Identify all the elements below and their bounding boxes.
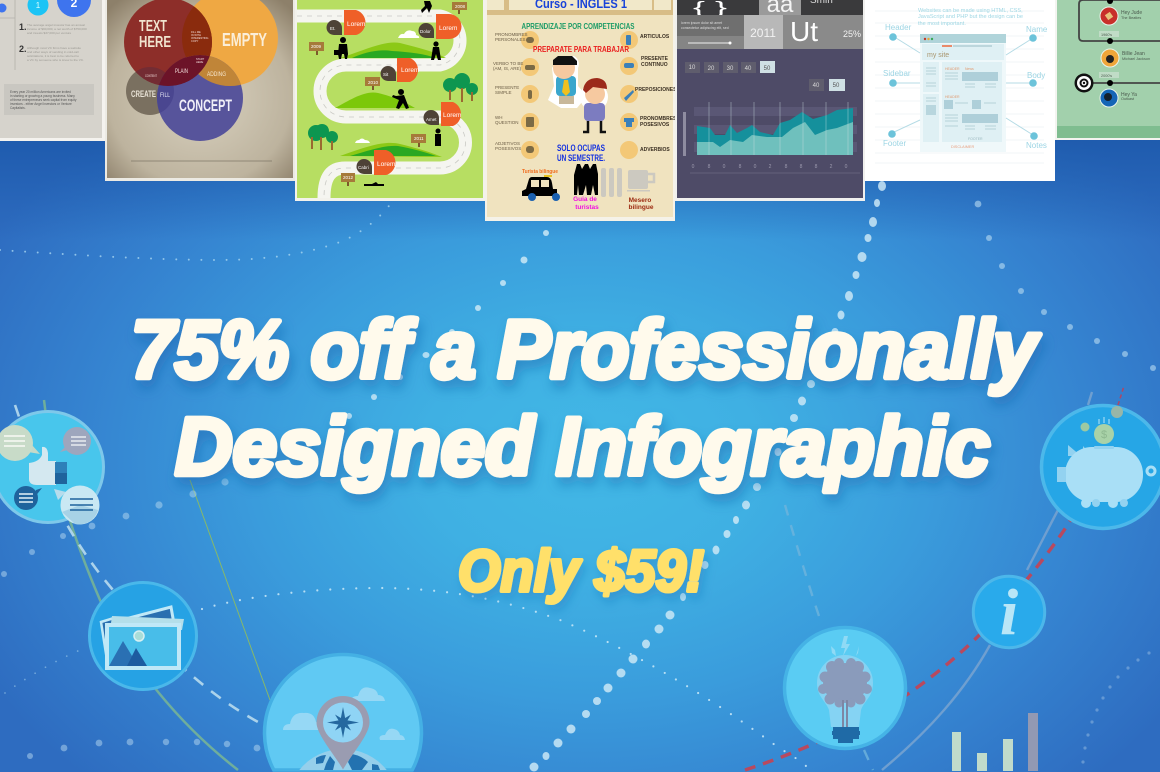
globe <box>299 749 387 770</box>
thumbnail: winding road timeline: Lorem <box>401 67 419 74</box>
thumbnail: winding road timeline <box>295 0 485 201</box>
mountains <box>109 641 147 666</box>
thumbnail: English course poster: Mesero <box>629 197 651 204</box>
thumbnail: English course poster: VERBO TO BE <box>493 61 523 66</box>
thumbnail: venn diagram: CONTENT <box>145 74 158 78</box>
thumbnail: English course poster: ARTICULOS <box>640 34 670 40</box>
sun <box>134 631 144 641</box>
thumbnail: English course poster: ADJETIVOS <box>495 141 520 146</box>
thumbnail: dark dashboard chart: 8 <box>800 164 803 170</box>
thumbnail: investors text sheet: Although most VC firms have a website <box>27 46 81 50</box>
dotted trail: right side <box>975 201 1156 371</box>
thumbnail: winding road timeline: Et. <box>330 26 336 31</box>
icon: info: i <box>1000 576 1019 649</box>
bubble bottom-left <box>14 486 42 510</box>
bubble bottom-right <box>54 486 100 524</box>
thumbnail: winding road timeline: 2012 <box>343 175 354 180</box>
thumbnail: venn diagram: CONCEPT <box>179 96 232 115</box>
thumbnail: website anatomy: the most important. <box>918 21 966 27</box>
thumbnail: English course poster: PRESENTE <box>641 56 669 62</box>
thumbnail: website anatomy: JavaScript and PHP but the design can be <box>918 14 1023 20</box>
thumbnail: investors text sheet: income of $90,000, a net worth of $750,000 <box>27 27 87 31</box>
thumbnail: venn diagram: START <box>196 57 205 61</box>
thumbnail: website anatomy: Sidebar <box>883 69 911 78</box>
thumbnail: music timeline <box>1055 0 1160 140</box>
thumbnail: winding road timeline: Lorem <box>347 21 365 28</box>
thumbnail: English course poster: bilingue <box>629 204 654 211</box>
thumbnail: winding road timeline: 2008 <box>455 4 466 9</box>
dotted trail: top arc <box>0 202 392 260</box>
thumbnail: English course poster: POSESIVOS <box>495 146 521 151</box>
bar chart <box>952 713 1038 771</box>
thumbnail: dark dashboard chart: Ut <box>790 16 818 47</box>
thumbnail: English course poster: PREPARATE PARA TRABAJAR <box>533 45 629 54</box>
thumbnail: venn diagram: ADDING <box>207 71 226 78</box>
bubble top-right <box>60 427 91 455</box>
thumbnail: dark dashboard chart: 30 <box>727 66 734 72</box>
thumbnail: investors text sheet: in starting or growing a young business. Many <box>10 94 75 98</box>
thumbnail: music timeline: Billie Jean <box>1122 51 1145 57</box>
top sheet <box>110 616 184 630</box>
thumbnail: website anatomy: Header <box>885 23 912 32</box>
thumbnail: English course poster: CONTINUO <box>641 62 668 68</box>
thumbnail: dark dashboard chart: 0 <box>692 164 695 170</box>
thumbnail: English course poster: WH <box>495 115 502 120</box>
bulb base <box>832 727 860 743</box>
thumbnail: investors text sheet: 2. <box>19 44 27 54</box>
thumbnail: dark dashboard chart: 2 <box>769 164 772 170</box>
thumbnail: English course poster: APRENDIZAJE POR COMPETENCIAS <box>522 22 635 31</box>
thumbnail: venn diagram: HERE <box>196 60 203 64</box>
thumbnail: English course poster: Turista bilingue <box>522 169 558 175</box>
dotted trail: middle arc <box>202 588 806 766</box>
thumbnail: music timeline: The Beatles <box>1121 16 1141 20</box>
thumbnail: venn diagram: EMPTY <box>222 30 267 50</box>
thumbnail: venn diagram: FILL ME <box>191 30 201 34</box>
thumbnail: investors text sheet: and other ways of sending in cold-call <box>27 50 79 54</box>
thumbnail: English course poster: Guia de <box>573 196 597 203</box>
thumbnail: website anatomy: Body <box>1027 71 1045 80</box>
thumbnail: winding road timeline: 2010 <box>368 80 379 85</box>
thumbnail: investors text sheet: Capitalists. <box>10 106 26 110</box>
thumbnail: English course poster: PREPOSICIONES <box>635 87 677 93</box>
compass <box>323 702 363 742</box>
thumbnail: dark dashboard chart: 20 <box>708 66 715 72</box>
thumbnail: dark dashboard chart: 40 <box>745 66 752 72</box>
thumbnail: website anatomy: my site <box>927 52 949 59</box>
thumbnail: winding road timeline: 2009 <box>311 44 322 49</box>
thumbnail: dark dashboard chart: 0 <box>723 164 726 170</box>
thumbnail: investors text sheet: solicitations, it is best to be referred to <box>27 54 79 58</box>
thumbnail: dark dashboard chart: 50 <box>833 83 840 89</box>
thumbnail: venn diagram: INTERESTING <box>191 36 208 40</box>
thumbnail: dark dashboard chart: 2011 <box>750 26 776 40</box>
thumbnail: website anatomy: Name <box>1026 25 1048 34</box>
coin slot <box>1094 446 1114 449</box>
snout <box>1057 467 1066 482</box>
dotted trail: large dots <box>346 181 886 772</box>
thumbnail: venn diagram: TEXT <box>139 18 167 35</box>
thumbnail: winding road timeline: Cabri <box>358 165 369 170</box>
thumbnail: venn diagram: CREATE <box>131 89 156 99</box>
thumbnail: music timeline: 2000's <box>1101 74 1112 78</box>
back frame <box>114 607 174 624</box>
title <box>131 304 1041 492</box>
thumbnail: music timeline: Outkast <box>1121 97 1135 101</box>
thumbnail: investors text sheet: 1 <box>36 1 41 10</box>
middle frame <box>101 618 114 660</box>
price callout: Only $59! <box>458 539 704 604</box>
dotted trail: lower left large dots <box>1 478 260 759</box>
thumbnail: investors text sheet: 1. <box>19 22 27 32</box>
thumbnail: website anatomy: Footer <box>883 139 906 148</box>
thumbnail: investors text sheet: Every year 20 million Americans are invited <box>10 90 71 94</box>
connector lines <box>15 386 1124 770</box>
cuff <box>55 462 67 484</box>
icon: piggy bank <box>1042 406 1160 528</box>
feet <box>1081 498 1128 508</box>
thumbnail: venn diagram: FILL <box>160 93 171 99</box>
thumbnail: English course poster: ADVERBIOS <box>640 147 670 153</box>
thumbnail: dark dashboard chart: 0 <box>845 164 848 170</box>
thumbnail: dark dashboard chart: 8 <box>785 164 788 170</box>
thumbnail: website anatomy: News <box>965 67 974 71</box>
thumbnail: dark dashboard chart: 50 <box>764 66 771 72</box>
dotted trail: lower right <box>1081 651 1151 764</box>
thumbnail: dark dashboard chart: 8 <box>739 164 742 170</box>
thumbnail: music timeline: Hey Ya <box>1121 92 1137 98</box>
thumbnail: English course poster: PRESENTE <box>495 85 519 90</box>
thumbnail: dark dashboard chart: 40 <box>813 83 820 89</box>
thumbnail: venn diagram: IN WITH <box>191 33 201 37</box>
thumbnail: English course poster: turistas <box>575 204 599 211</box>
thumbnail: website anatomy: HEADER <box>945 67 960 71</box>
thumbnail: venn diagram: COPY <box>191 39 199 43</box>
brain <box>818 658 872 728</box>
thumbnail: English course poster: PRONOMBRES <box>640 116 677 122</box>
thumbnail: music timeline: Hey Jude <box>1121 10 1142 16</box>
icon: info <box>973 576 1045 649</box>
thumbnail: website anatomy: FOOTER <box>968 137 983 141</box>
dotted trail: lower left <box>5 648 85 693</box>
thumbnail: winding road timeline: Sit <box>383 72 389 77</box>
thumbnail: venn diagram <box>105 0 295 181</box>
thumbnail: dark dashboard chart: 25% <box>843 29 861 39</box>
icon: map pin over globe <box>264 654 421 770</box>
thumbnail: winding road timeline: Lorem <box>443 112 461 119</box>
thumbnail: English course poster: SIMPLE <box>495 90 512 95</box>
thumbnail: investors text sheet <box>0 0 105 141</box>
thumbnail: website anatomy: Websites can be made using HTML, CSS, <box>918 8 1023 14</box>
icon: brain light bulb <box>784 628 906 748</box>
thumbnail: winding road timeline: Dolor <box>420 29 431 34</box>
thumbnail: investors text sheet: and invests $37,000 per venture <box>27 31 71 35</box>
thumbnail: investors text sheet: The average angel investor has an annual <box>27 23 85 27</box>
thumbnail: venn diagram: HERE <box>139 34 171 51</box>
title line 2: Designed Infographic <box>175 402 990 492</box>
thumbnail: English course poster <box>485 0 677 221</box>
bubble top-left <box>0 425 40 461</box>
thumbnail: winding road timeline: 2011 <box>414 136 424 141</box>
tail <box>1147 467 1155 475</box>
thumbnail: English course poster: UN SEMESTRE. <box>557 153 605 163</box>
thumbnail: dark dashboard chart: 2 <box>830 164 833 170</box>
thumbnail: English course poster: SOLO OCUPAS <box>557 143 605 153</box>
thumb <box>29 447 56 485</box>
thumbnail: English course poster: QUESTION <box>495 120 519 125</box>
thumbnail: dark dashboard chart <box>675 0 865 201</box>
bulb glass <box>817 655 873 727</box>
thumbnail: website anatomy: HEADER <box>945 95 960 99</box>
thumbnail: investors text sheet: of these entrepreneurs seek capital from equity <box>10 98 77 102</box>
thumbnail: winding road timeline: Amet <box>426 117 437 122</box>
thumbnail: music timeline: Michael Jackson <box>1122 57 1150 61</box>
thumbnail: dark dashboard chart: 8 <box>708 164 711 170</box>
pin <box>316 696 370 770</box>
thumbnail: dark dashboard chart: 8 <box>815 164 818 170</box>
thumbnail: investors text sheet: investors - either Angel Investors or Venture <box>10 102 72 106</box>
icon: social thumbs-up bubble <box>0 412 104 524</box>
thumbnail: investors text sheet: a VC by someone who is know to the VC. <box>27 58 84 62</box>
thumbnail: dark dashboard chart: 0 <box>754 164 757 170</box>
thumbnail: dark dashboard chart: consectetur adipiscing elit, sed <box>681 26 729 30</box>
thumbnail: winding road timeline: Lorem <box>439 25 457 32</box>
spark <box>831 636 859 656</box>
thumbnail: English course poster: PRONOMBRES <box>495 32 528 37</box>
thumbnail: winding road timeline: Lorem <box>377 161 395 168</box>
clouds <box>283 687 405 740</box>
thumbnail: website anatomy: Notes <box>1026 141 1047 150</box>
body <box>1065 447 1143 502</box>
thumbnail: music timeline: 1960's <box>1101 33 1112 37</box>
title line 1: 75% off a Professionally <box>131 304 1041 396</box>
thumbnail: English course poster: POSESIVOS <box>640 122 670 128</box>
thumbnail: website anatomy: DISCLAIMER <box>951 145 974 149</box>
thumbnail: venn diagram: PLAIN <box>175 69 188 75</box>
thumbnail: dark dashboard chart: 10 <box>689 65 696 71</box>
thumbnail: website anatomy <box>865 0 1055 181</box>
ears <box>1068 445 1092 456</box>
thumbnail: dark dashboard chart: lorem ipsum dolor sit amet <box>681 21 722 25</box>
front picture <box>107 625 179 668</box>
thumbnail: English course poster: (AM, IS, ARE) <box>493 66 522 71</box>
thumbnail: English course poster: PERSONALES <box>495 37 526 42</box>
coins: $ <box>1101 429 1107 441</box>
icon: photo frames <box>90 582 196 690</box>
